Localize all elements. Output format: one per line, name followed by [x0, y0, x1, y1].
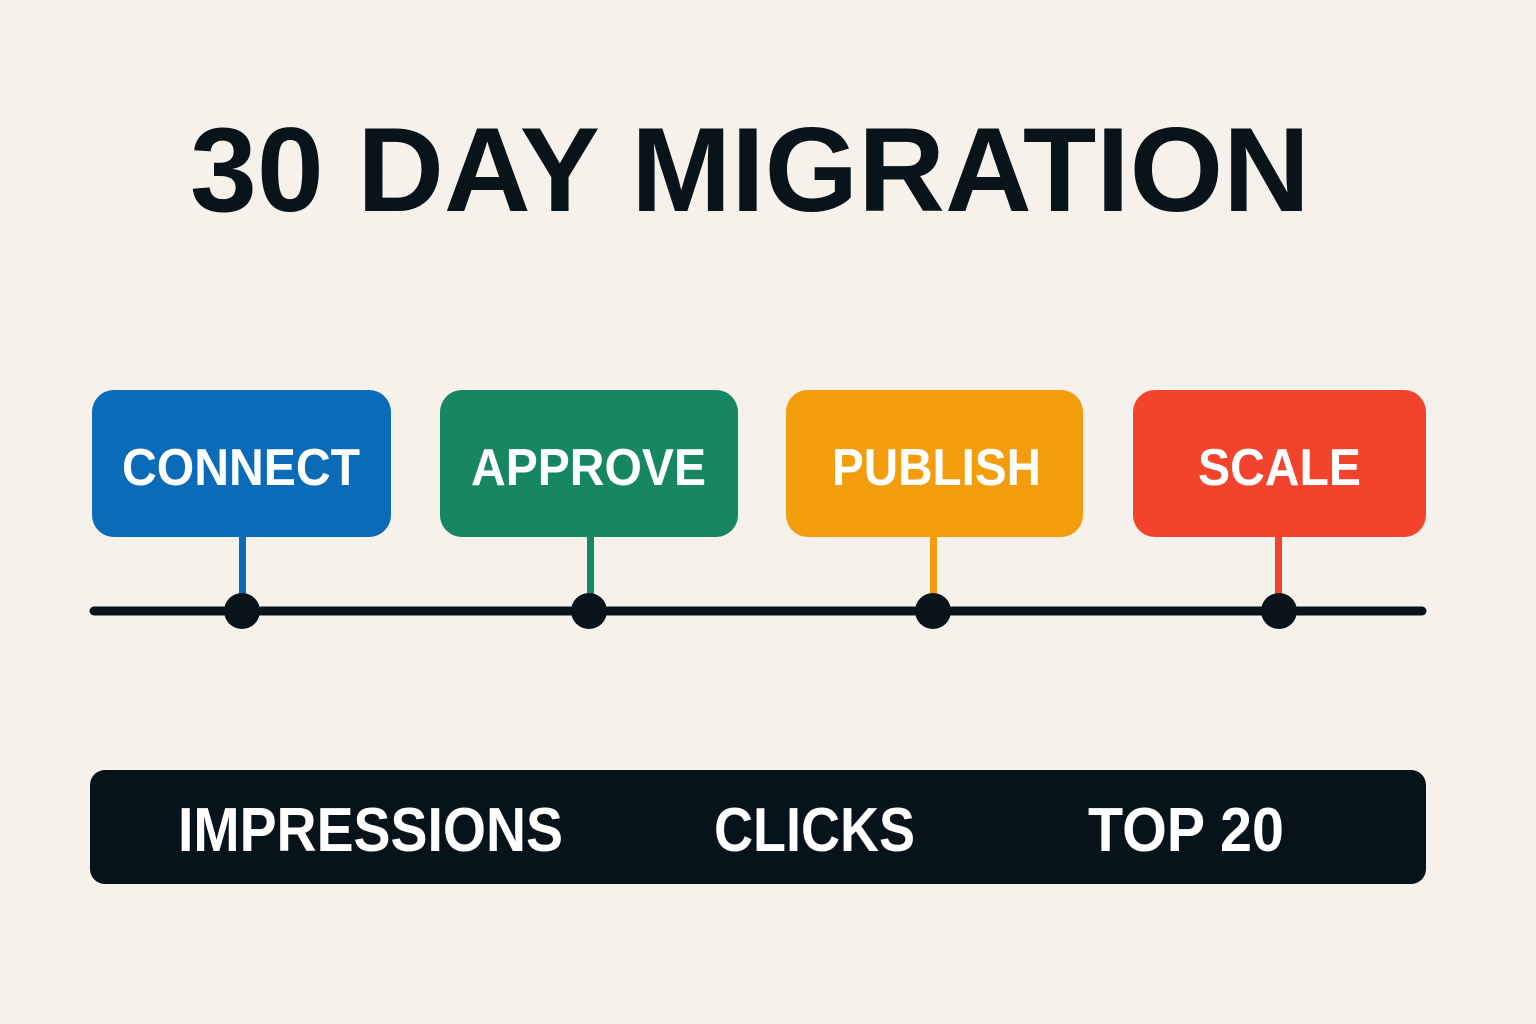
stage: connect: [92, 390, 391, 629]
stage: approve: [440, 390, 738, 629]
stage: approve: APPROVE: [471, 439, 706, 497]
stage: publish: [786, 390, 1083, 629]
metrics bar: [90, 770, 1426, 884]
metric: impressions: IMPRESSIONS: [178, 796, 563, 865]
stage: publish: PUBLISH: [832, 439, 1041, 497]
stage: connect: CONNECT: [122, 439, 360, 497]
metric: top 20: TOP 20: [1088, 796, 1284, 865]
stage: scale: SCALE: [1198, 439, 1361, 497]
title: 30 DAY MIGRATION: [190, 103, 1310, 237]
metric: clicks: CLICKS: [714, 796, 915, 865]
timeline line: [94, 606, 1422, 616]
stage: scale: [1133, 390, 1426, 629]
